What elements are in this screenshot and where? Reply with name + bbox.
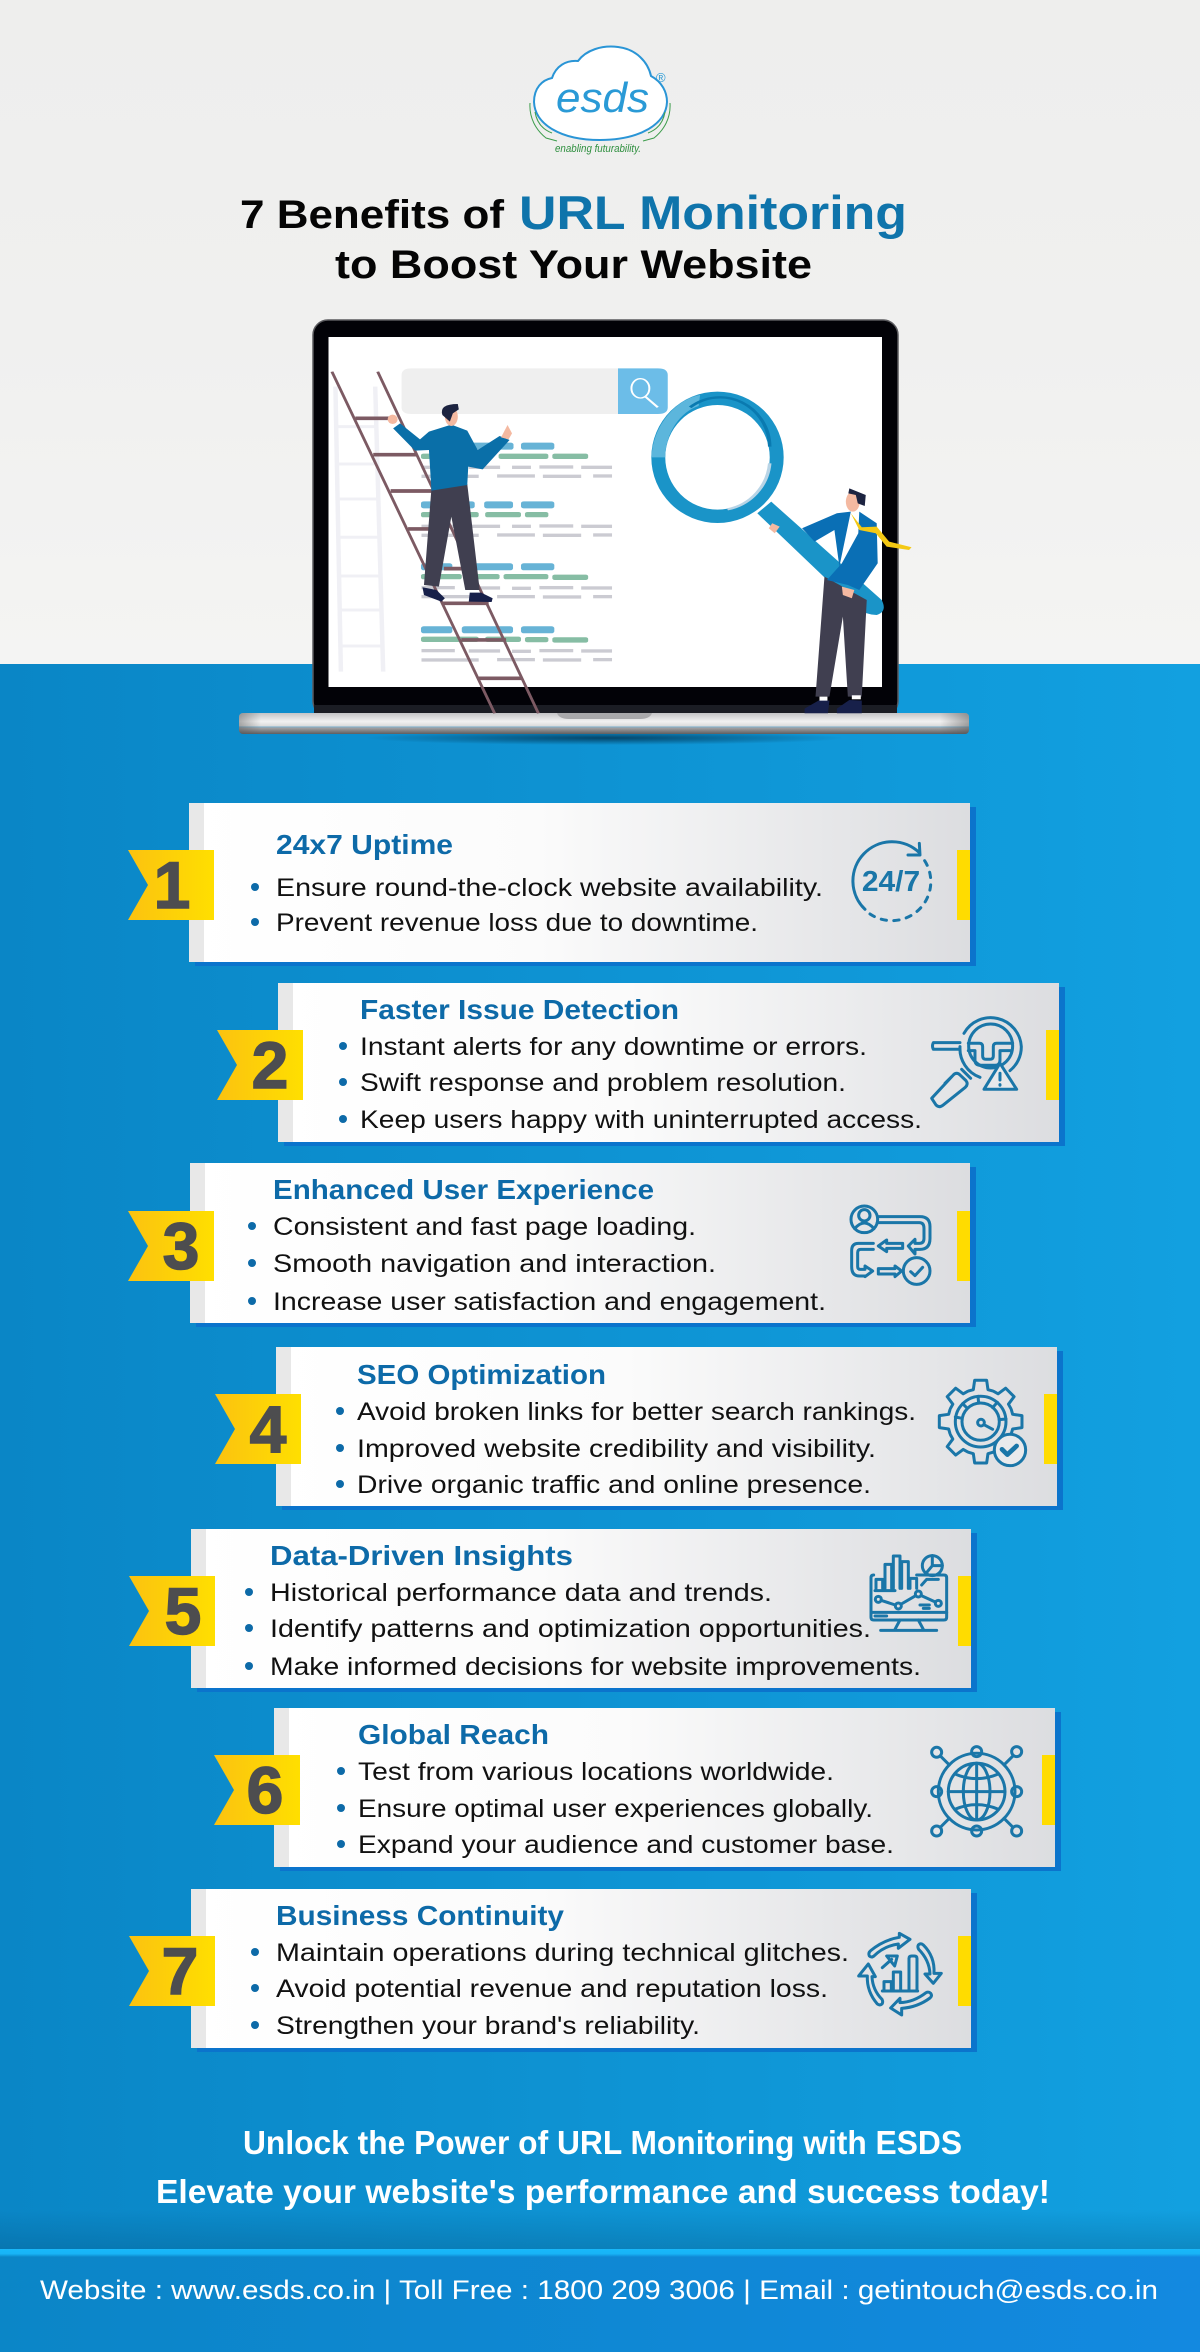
icon: analytics monitor: [871, 1556, 947, 1630]
background: blue lower section: [0, 664, 1200, 2352]
bullets 7: Strengthen your brand's reliability.: [276, 2012, 700, 2040]
footer contact text: Website : www.esds.co.in | Toll Free : 1800 209 3006 | Email : getintouch@esds.co.in: [40, 2275, 1158, 2305]
bullets 3: [248, 1213, 826, 1316]
bullets 7: [251, 1939, 849, 2040]
bullets 6: Expand your audience and customer base.: [358, 1831, 894, 1859]
bullets 6: [337, 1758, 894, 1859]
icon: magnifier with warning: [932, 1018, 1021, 1107]
bullets 3: Smooth navigation and interaction.: [273, 1250, 716, 1278]
title: URL Monitoring: [519, 186, 907, 239]
person on ladder: [388, 404, 512, 602]
badge 1: [128, 848, 214, 922]
magnifying glass: [651, 392, 884, 615]
background: light top: [0, 0, 1200, 664]
title: [240, 186, 907, 287]
logo: esds cloud: esds: [556, 74, 649, 121]
heading 2: Faster Issue Detection: [360, 994, 679, 1025]
card 2: Faster Issue Detection: [217, 983, 1065, 1146]
card 6: Global Reach: [214, 1708, 1061, 1871]
badge 1: 1: [154, 848, 190, 922]
front ladder: [332, 372, 538, 713]
call to action text: Elevate your website's performance and success today!: [156, 2173, 1050, 2210]
bullets 4: [336, 1398, 916, 1499]
badge 4: 4: [250, 1392, 287, 1466]
badge 2: [217, 1028, 303, 1102]
call to action text: [156, 2124, 1050, 2210]
person with magnifier: [769, 488, 912, 713]
bullets 6: Ensure optimal user experiences globally.: [358, 1795, 873, 1823]
logo: esds cloud: ®: [656, 70, 666, 85]
bullets 2: [339, 1033, 922, 1134]
heading 1: 24x7 Uptime: [276, 829, 453, 860]
badge 5: 5: [165, 1574, 201, 1648]
card 4: SEO Optimization: [215, 1347, 1063, 1510]
badge 7: [129, 1934, 215, 2008]
bullets 2: Swift response and problem resolution.: [360, 1069, 846, 1097]
call to action text: Unlock the Power of URL Monitoring with ESDS: [243, 2124, 962, 2161]
bullets 1: Prevent revenue loss due to downtime.: [276, 909, 758, 937]
bullets 7: Maintain operations during technical glitches.: [276, 1939, 849, 1967]
badge 3: [128, 1209, 214, 1283]
logo: esds cloud: enabling futurability.: [555, 143, 641, 155]
bullets 4: Avoid broken links for better search rankings.: [357, 1398, 916, 1426]
card 5: Data-Driven Insights: [129, 1529, 977, 1692]
badge 6: [214, 1753, 300, 1827]
title: 7 Benefits of: [240, 193, 505, 237]
laptop illustration: [239, 320, 969, 745]
heading 6: Global Reach: [358, 1719, 549, 1750]
badge 4: [215, 1392, 301, 1466]
bullets 6: Test from various locations worldwide.: [358, 1758, 834, 1786]
bullets 5: Identify patterns and optimization opportunities.: [270, 1615, 871, 1643]
bullets 3: Consistent and fast page loading.: [273, 1213, 696, 1241]
icon: 24/7 clock: 24/7: [862, 866, 920, 898]
heading 3: Enhanced User Experience: [273, 1174, 654, 1205]
card 1: 24x7 Uptime: [128, 803, 976, 966]
bullets 5: Historical performance data and trends.: [270, 1579, 772, 1607]
card 7: Business Continuity: [129, 1889, 977, 2052]
bullets 5: Make informed decisions for website improvements.: [270, 1653, 921, 1681]
heading 7: Business Continuity: [276, 1900, 564, 1931]
heading 5: Data-Driven Insights: [270, 1540, 573, 1571]
bullets 1: [251, 874, 823, 937]
title: to Boost Your Website: [335, 243, 812, 287]
badge 7: 7: [162, 1934, 198, 2008]
icon: 24/7 clock: [853, 842, 931, 921]
heading 4: SEO Optimization: [357, 1359, 606, 1390]
bullets 7: Avoid potential revenue and reputation loss.: [276, 1975, 828, 2003]
back ladder: [335, 387, 383, 672]
badge 6: 6: [247, 1753, 283, 1827]
bullets 4: Drive organic traffic and online presence.: [357, 1471, 871, 1499]
bullets 5: [245, 1579, 921, 1681]
bullets 1: Ensure round-the-clock website availability.: [276, 874, 823, 902]
bullets 4: Improved website credibility and visibility.: [357, 1435, 876, 1463]
search bar: [402, 368, 668, 414]
icon: user journey: [851, 1206, 930, 1284]
icon: cycle with growth chart: [859, 1933, 941, 2015]
logo: esds cloud: [530, 47, 670, 155]
card 3: Enhanced User Experience: [128, 1163, 976, 1327]
bullets 2: Instant alerts for any downtime or errors.: [360, 1033, 867, 1061]
icon: gear with gauge: [939, 1380, 1026, 1466]
footer band: [0, 2210, 1200, 2352]
badge 3: 3: [163, 1209, 199, 1283]
badge 2: 2: [252, 1028, 288, 1102]
icon: connected globe: [932, 1747, 1022, 1836]
badge 5: [129, 1574, 215, 1648]
bullets 2: Keep users happy with uninterrupted access.: [360, 1106, 922, 1134]
bullets 3: Increase user satisfaction and engagement.: [273, 1288, 826, 1316]
text lines on screen: [421, 443, 612, 662]
